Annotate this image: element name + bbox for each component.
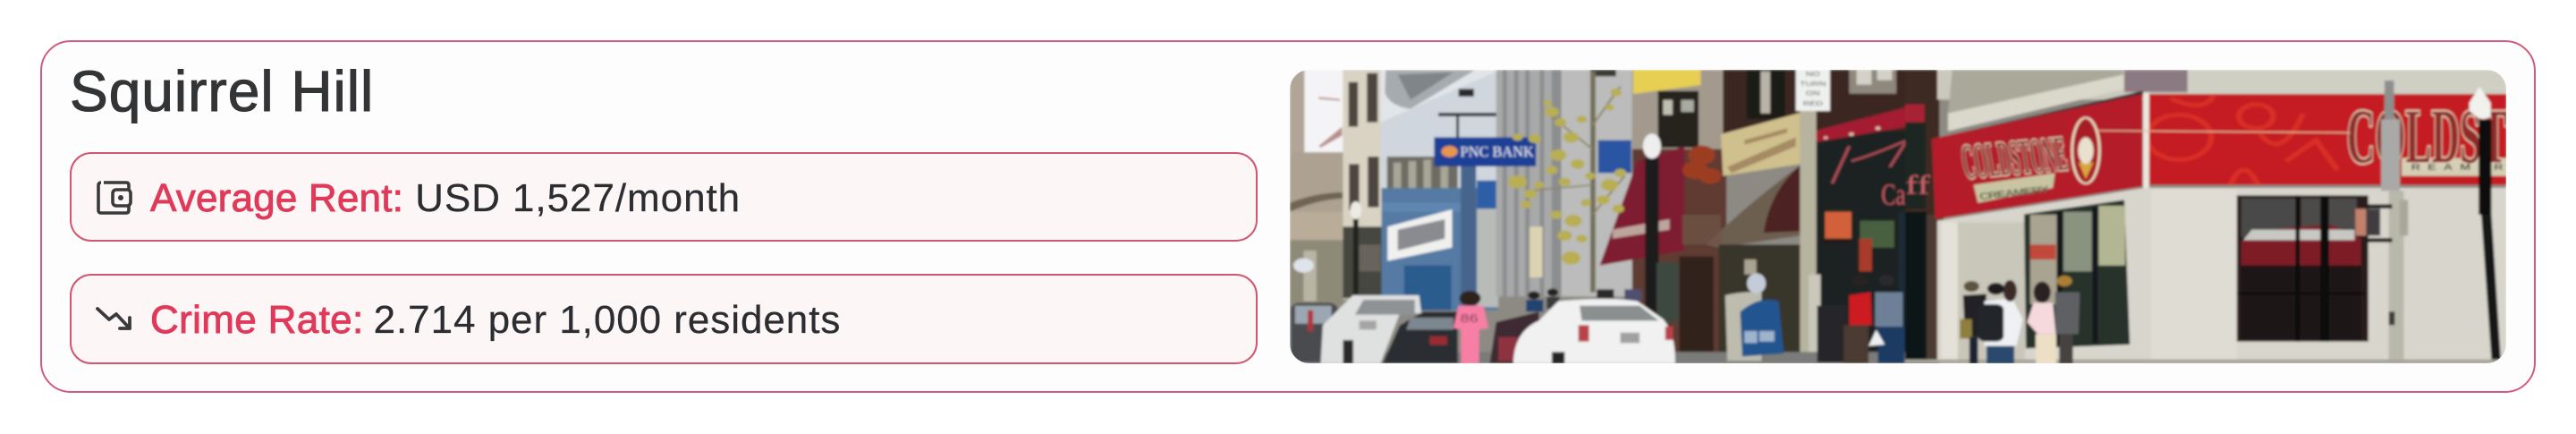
people xyxy=(1843,275,1904,363)
right half with ice cream shop: ff xyxy=(1905,171,1931,200)
sign: PNC BANK xyxy=(1461,144,1534,160)
tree xyxy=(1508,72,1626,293)
store window xyxy=(2024,200,2130,348)
person in pink xyxy=(1453,291,1488,363)
cars xyxy=(1291,302,1338,362)
columned building xyxy=(1494,70,1553,298)
rent text: Average Rent: USD 1,527/month xyxy=(150,176,741,220)
photo: street corner with storefronts xyxy=(1290,70,2506,363)
left half of street: TURN xyxy=(1800,81,1826,88)
street lamp xyxy=(2470,87,2501,361)
brick building with awning xyxy=(1632,70,1724,159)
sign band: CREAMERY xyxy=(1979,183,2050,202)
left half of street xyxy=(1290,70,1923,364)
sign band xyxy=(1932,92,2507,219)
card outline xyxy=(40,40,2536,393)
crime text: Crime Rate:2.714 per 1,000 residents xyxy=(150,298,841,342)
cafe right xyxy=(1816,131,1907,353)
panel: average rent xyxy=(70,152,1258,242)
left half of street: Café xyxy=(1881,177,1922,211)
utility pole xyxy=(2355,81,2408,364)
icon: trending down xyxy=(96,307,131,330)
sign band: REAMER xyxy=(2411,162,2504,172)
panel: neighbourhood card xyxy=(40,40,2536,393)
pole and sign xyxy=(1800,110,1817,355)
sign xyxy=(1434,137,1536,166)
left half of street: ON xyxy=(1806,89,1820,97)
left half of street: RED xyxy=(1803,100,1823,107)
upper facade xyxy=(1936,70,2189,102)
group of pedestrians xyxy=(1960,276,2080,364)
icon: wallet xyxy=(97,181,132,215)
dark brick upper xyxy=(1722,70,1907,134)
square window xyxy=(2237,195,2368,342)
mailbox xyxy=(1725,273,1784,361)
panel: crime rate xyxy=(70,274,1258,364)
sign band: COLDSTONE xyxy=(1957,125,2071,189)
right half with ice cream shop xyxy=(1905,70,2507,365)
street xyxy=(1290,352,1923,364)
person in pink: 86 xyxy=(1461,312,1479,325)
white car xyxy=(1513,299,1675,363)
left half of street: NO xyxy=(1806,71,1820,78)
title: Squirrel Hill xyxy=(70,59,374,123)
bank building xyxy=(1381,70,1498,189)
lower walls xyxy=(1937,188,2506,363)
